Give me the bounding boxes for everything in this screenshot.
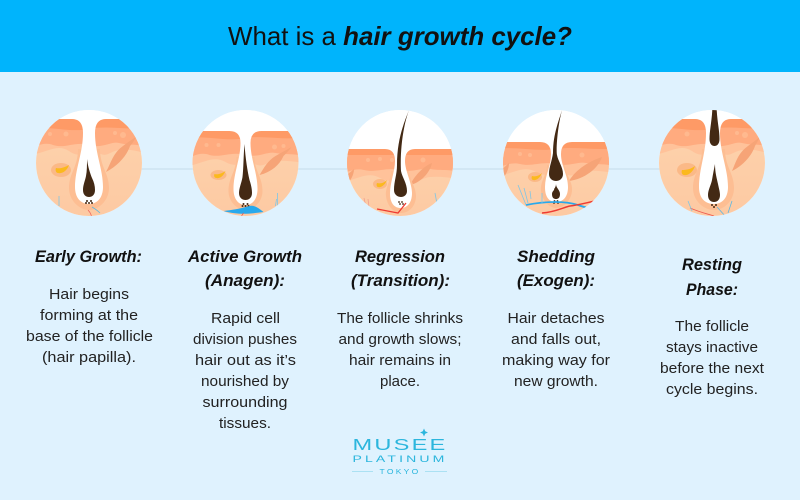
heading: shedding — [517, 247, 596, 290]
logo: Musee Platinum Tokyo: MUSEE — [352, 437, 448, 454]
heading: resting phase — [682, 255, 743, 299]
text: resting phase description: cycle begins. — [666, 381, 758, 398]
heading: regression — [351, 247, 450, 290]
text: regression description: and growth slows; — [338, 331, 462, 348]
panel: active growth — [186, 103, 306, 432]
heading: active growth — [187, 247, 302, 290]
icon: follicle early growth — [36, 110, 142, 216]
heading: resting phase: Phase: — [686, 280, 738, 299]
text: early growth description: forming at the — [40, 307, 138, 324]
logo: Musee Platinum Tokyo: PLATINUM — [352, 454, 448, 464]
icon: follicle regression — [347, 110, 453, 216]
text: early growth description — [26, 286, 153, 366]
text: early growth description: base of the follicle — [26, 328, 153, 345]
text: active growth description: surrounding — [202, 394, 288, 411]
text: shedding description: new growth. — [514, 373, 598, 390]
text: shedding description — [502, 310, 610, 390]
icon: follicle shedding — [503, 110, 609, 216]
heading: regression: (Transition): — [351, 271, 450, 290]
text: regression description: hair remains in — [349, 352, 451, 369]
text: shedding description: Hair detaches — [508, 310, 604, 327]
text: resting phase description — [660, 318, 765, 398]
text: regression description — [337, 310, 463, 390]
text: active growth description: Rapid cell — [211, 310, 280, 327]
panel: early growth — [26, 103, 153, 366]
heading: shedding: (Exogen): — [517, 271, 595, 290]
icon: follicle resting phase — [659, 110, 765, 216]
text: active growth description: nourished by — [201, 373, 289, 390]
heading: regression: Regression — [355, 247, 445, 266]
text: shedding description: making way for — [502, 352, 610, 369]
heading: shedding: Shedding — [517, 247, 596, 266]
logo: Musee Platinum Tokyo: TOKYO — [380, 467, 420, 476]
text: regression description: place. — [380, 373, 420, 390]
title: What is a hair growth cycle? — [228, 21, 572, 51]
heading: resting phase: Resting — [682, 255, 743, 274]
text: active growth description: division pushes — [193, 331, 297, 348]
icon: follicle active growth — [192, 110, 298, 216]
panel: shedding — [503, 110, 610, 389]
text: early growth description: (hair papilla). — [42, 349, 136, 366]
text: resting phase description: The follicle — [675, 318, 749, 335]
text: shedding description: and falls out, — [511, 331, 601, 348]
text: active growth description: hair out as it’s — [195, 352, 296, 369]
panel: resting phase — [659, 110, 765, 397]
text: regression description: The follicle shrinks — [337, 310, 463, 327]
text: resting phase description: stays inactive — [666, 339, 758, 356]
text: active growth description: tissues. — [219, 415, 271, 432]
heading: active growth: (Anagen): — [205, 271, 285, 290]
text: early growth description: Hair begins — [49, 286, 129, 303]
text: active growth description — [193, 310, 297, 432]
heading: early growth: Early Growth: — [35, 247, 142, 266]
panel: regression — [337, 103, 463, 390]
text: resting phase description: before the next — [660, 360, 765, 377]
header banner — [0, 0, 800, 72]
heading: active growth: Active Growth — [187, 247, 302, 266]
logo: Musee Platinum Tokyo — [352, 428, 448, 476]
